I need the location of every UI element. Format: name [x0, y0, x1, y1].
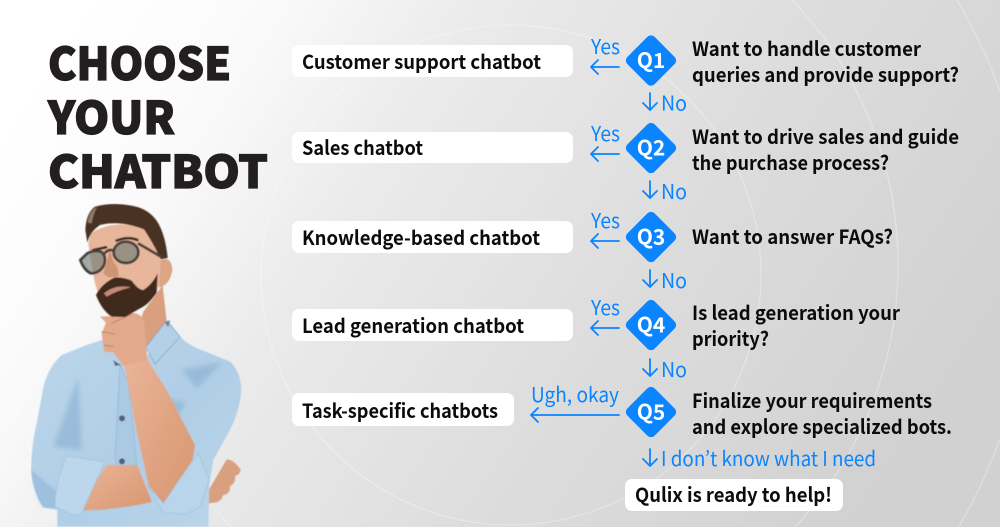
question 1 text: Want to handle customer: [692, 33, 921, 62]
final branch: I don’t know what I need: [661, 442, 876, 472]
eyebrows: [93, 238, 137, 250]
no branch Q2: No: [661, 175, 687, 205]
hair: [85, 204, 168, 259]
yes branch Q1: [590, 30, 620, 74]
yes branch Q2: [590, 117, 620, 161]
callout: Qulix: Qulix is ready to help!: [635, 479, 832, 508]
shirt body and sleeves: [31, 321, 241, 527]
diamond Q1: [624, 33, 678, 88]
answer box: Customer support chatbot: Customer support chatbot: [302, 46, 541, 75]
rolled sleeve left: [55, 456, 105, 516]
neck: [133, 285, 167, 358]
title: YOUR: [47, 82, 175, 147]
no branch Q3: [643, 264, 687, 294]
face: [88, 224, 161, 317]
diamond Q3: Q3: [637, 222, 665, 252]
yes branch Q4: [590, 291, 620, 335]
title: CHATBOT: [48, 136, 268, 201]
no branch Q4: [643, 353, 687, 383]
beard: [96, 273, 158, 317]
diamond Q2: [624, 121, 678, 175]
question 5 text: [692, 385, 952, 440]
glasses: [80, 242, 163, 273]
no branch Q1: [643, 86, 687, 116]
nose shadow: [103, 250, 118, 277]
diamond Q4: Q4: [637, 310, 665, 340]
lips: [104, 286, 131, 297]
answer box: Sales chatbot: Sales chatbot: [302, 132, 423, 161]
question 1 text: [692, 33, 959, 88]
no branch Q1: No: [661, 86, 687, 116]
answer box: Task-specific chatbots: Task-specific chatbots: [302, 395, 498, 424]
question 2 text: the purchase process?: [692, 147, 889, 176]
no branch Q4: No: [661, 353, 687, 383]
diamond Q1: Q1: [637, 45, 665, 75]
diamond Q5: Q5: [637, 396, 665, 426]
collar: [146, 321, 180, 364]
yes branch Q2: Yes: [590, 117, 620, 147]
question 4 text: priority?: [692, 323, 769, 352]
lower forearm: [83, 465, 152, 511]
question 4 text: [692, 297, 900, 352]
placket and buttons: [115, 363, 137, 467]
ear: [159, 259, 172, 287]
question 2 text: [692, 121, 959, 176]
title: CHOOSE: [48, 28, 231, 93]
answer box: Knowledge-based chatbot: Knowledge-based chatbot: [302, 222, 540, 251]
diamond Q5: [624, 385, 678, 439]
fist: [100, 313, 147, 366]
yes branch Q3: Yes: [590, 204, 620, 234]
diamond Q4: [624, 298, 678, 352]
okay branch Q5: [531, 378, 619, 422]
far hand: [200, 459, 241, 505]
diamond Q2: Q2: [637, 132, 665, 162]
no branch Q3: No: [661, 264, 687, 294]
question 4 text: Is lead generation your: [692, 297, 900, 326]
rolled sleeve right: [147, 453, 209, 514]
title: [47, 28, 268, 201]
okay branch Q5: Ugh, okay: [531, 378, 619, 408]
yes branch Q1: Yes: [590, 30, 620, 60]
raised forearm: [124, 358, 195, 503]
question 2 text: Want to drive sales and guide: [692, 121, 959, 150]
illustration: thoughtful man with glasses: [31, 204, 241, 527]
question 5 text: and explore specialized bots.: [692, 411, 952, 440]
no branch Q2: [643, 175, 687, 205]
shirt shading: [32, 362, 223, 508]
diamond Q3: [624, 210, 678, 264]
answer box: Lead generation chatbot: Lead generation chatbot: [302, 310, 524, 339]
question 3 text: Want to answer FAQs?: [692, 221, 893, 250]
question 1 text: queries and provide support?: [692, 59, 959, 88]
yes branch Q3: [590, 204, 620, 248]
answer box: Sales chatbot: [292, 132, 573, 163]
question 5 text: Finalize your requirements: [692, 385, 932, 414]
yes branch Q4: Yes: [590, 291, 620, 321]
